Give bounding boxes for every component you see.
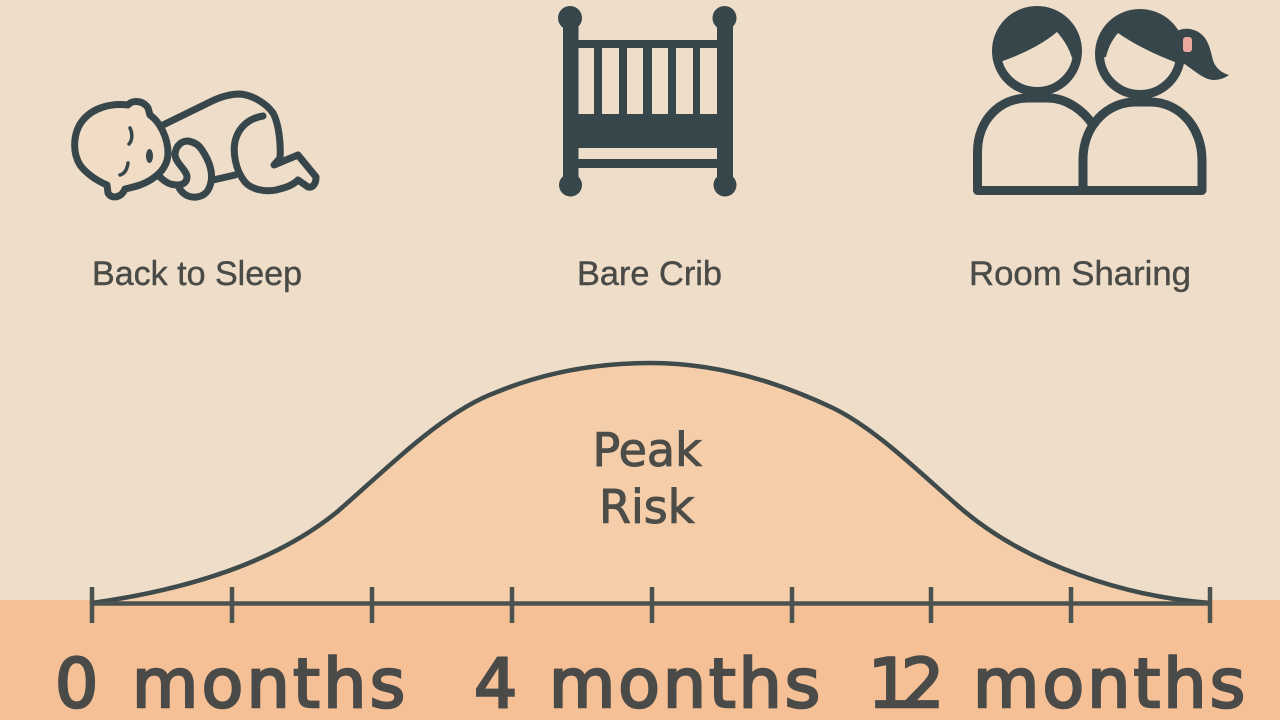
icon: right parent with ponytail — [1080, 13, 1229, 190]
icon: bare crib — [558, 6, 736, 196]
icon: sleeping baby — [75, 94, 316, 197]
risk curve chart — [92, 363, 1210, 623]
icon: left parent — [978, 10, 1095, 190]
label: Room Sharing: Room Sharing — [969, 255, 1191, 293]
curve area — [92, 363, 1210, 603]
peak risk label: Risk — [599, 480, 695, 534]
curve line — [92, 363, 1210, 603]
icon: room sharing parents — [978, 10, 1229, 190]
label: Back to Sleep: Back to Sleep — [92, 255, 302, 293]
peak risk label: Peak — [592, 423, 702, 477]
label: Bare Crib: Bare Crib — [577, 255, 722, 293]
bottom peach band — [0, 600, 1280, 720]
timeline axis — [92, 587, 1210, 623]
